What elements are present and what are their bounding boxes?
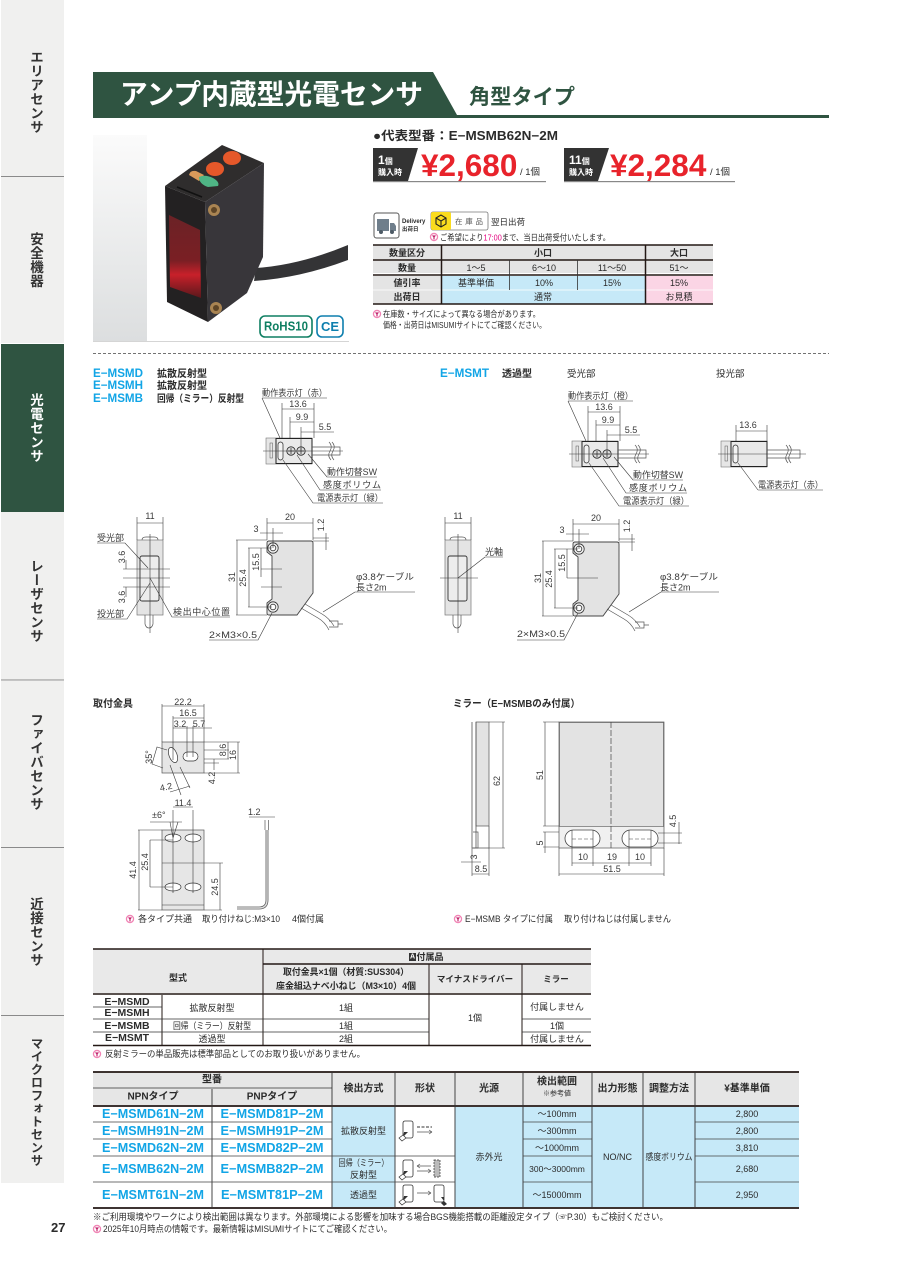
table header: 光源: [479, 1082, 499, 1094]
front view drawing: 11: [453, 511, 463, 521]
accessories table: 拡散反射型: [189, 1002, 235, 1013]
price block: [373, 128, 735, 183]
CE badge: [317, 316, 343, 337]
quantity discount table: 大口: [670, 247, 688, 258]
mirror front view: 51.5: [603, 864, 621, 874]
mirror front view: 4.5: [668, 815, 678, 827]
emitter top view: 13.6: [739, 420, 757, 430]
model numbers: E−MSMD61N−2M: [102, 1107, 204, 1121]
detection range: 300～3000mm: [529, 1164, 585, 1174]
product photo: [93, 135, 349, 342]
bracket top view: 16.5: [179, 708, 197, 718]
price tier: 11 pieces: 11個: [569, 153, 590, 167]
model numbers: E−MSMB62N−2M: [102, 1162, 204, 1176]
top view drawing: [262, 387, 383, 503]
table header: PNPタイプ: [247, 1090, 297, 1102]
table header: 調整方法: [649, 1082, 689, 1094]
prices: 2,800: [736, 1109, 758, 1119]
emitter top view: 電源表示灯（赤）: [758, 480, 823, 490]
delivery info: Delivery: [402, 219, 426, 225]
accessories table: E−MSMH: [104, 1007, 150, 1019]
prices: 2,680: [736, 1164, 758, 1174]
model and section labels: 投光部: [716, 368, 745, 380]
icon: delivery truck: [374, 213, 399, 238]
tab: fiber sensor: ファイバセンサ: [28, 713, 44, 811]
model labels: 拡散反射型: [157, 379, 207, 392]
front view drawing: 光軸: [485, 546, 503, 557]
mirror front view: 10: [578, 852, 588, 862]
detection range: ～1000mm: [535, 1143, 579, 1153]
quantity discount table: 1～5: [466, 263, 486, 273]
front view drawing: 検出中心位置: [173, 606, 230, 617]
subtitle: 角型タイプ: [469, 85, 575, 109]
price tier: 11 pieces: 購入時: [569, 167, 593, 177]
price tier: 1 piece: 購入時: [378, 167, 402, 177]
prices: [736, 1109, 758, 1200]
price tier: 11 pieces: ¥2,284: [610, 147, 707, 183]
title text: アンプ内蔵型光電センサ: [120, 79, 423, 110]
detection method: 反射型: [350, 1169, 377, 1180]
bracket note: [126, 913, 324, 924]
quantity discount table: [373, 245, 713, 304]
model labels: [93, 367, 244, 405]
side view drawing: 20: [285, 512, 295, 522]
bracket note: 取り付けねじ:M3×10: [202, 914, 280, 924]
delivery info: 出荷日: [402, 225, 419, 233]
side view drawing: 31: [227, 572, 237, 582]
side view drawing: 15.5: [251, 553, 261, 571]
accessories table: 2組: [339, 1033, 353, 1044]
accessories table: 座金組込ナベ小ねじ（M3×10）4個: [276, 980, 416, 991]
model labels: 拡散反射型: [157, 367, 207, 380]
quantity discount table: 51～: [669, 263, 689, 273]
accessories table: マイナスドライバー: [437, 974, 513, 984]
sidebar category tabs: [1, 0, 64, 1183]
front view drawing: 受光部: [97, 532, 124, 543]
accessories table: 1組: [339, 1020, 353, 1031]
model numbers: E−MSMD81P−2M: [220, 1107, 324, 1121]
tab: area sensor: [1, 0, 64, 177]
tab: laser sensor: [1, 512, 64, 680]
detection range: ～15000mm: [532, 1190, 582, 1200]
receiver top view: 9.9: [602, 415, 614, 425]
top view drawing: 5.5: [319, 422, 331, 432]
quantity discount table: 6～10: [532, 263, 556, 273]
front view drawing: 3.6: [117, 551, 127, 563]
accessories table: ミラー: [543, 974, 569, 984]
CE badge: CE: [321, 319, 339, 334]
model numbers: E−MSMH91N−2M: [102, 1124, 204, 1138]
table header: NPNタイプ: [127, 1090, 179, 1102]
price tier: 1 piece: [373, 147, 546, 183]
price tier: 11 pieces: [564, 147, 735, 183]
side view drawing: [517, 513, 719, 640]
front view drawing: [440, 511, 503, 633]
prices: 2,800: [736, 1126, 758, 1136]
bracket L side view: [237, 807, 275, 908]
detection range: ～100mm: [537, 1109, 577, 1119]
table header: ※参考値: [543, 1088, 571, 1098]
bracket top view: 35°: [144, 750, 154, 764]
bracket top view: [144, 697, 240, 795]
side view drawing: 20: [591, 513, 601, 523]
side view drawing: 15.5: [557, 554, 567, 572]
mirror front view: 10: [635, 852, 645, 862]
bracket top view: 4.2: [207, 772, 217, 784]
delivery info: 翌日出荷: [491, 217, 526, 227]
detection method: 回帰（ミラー）: [338, 1157, 388, 1168]
tab: laser sensor: レーザセンサ: [28, 559, 44, 643]
side view drawing: 長さ2m: [660, 582, 691, 592]
mirror note: 取り付けねじは付属しません: [564, 914, 671, 924]
accessories table: 1個: [468, 1012, 482, 1023]
quantity discount table: 15%: [670, 278, 688, 288]
table header: [127, 1072, 770, 1102]
accessories table: 付属品: [416, 951, 444, 962]
common specs: NO/NC: [603, 1152, 632, 1162]
side view drawing: φ3.8ケーブル: [356, 571, 414, 582]
top view drawing: 電源表示灯（緑）: [317, 492, 383, 503]
model and section labels: [440, 367, 745, 380]
bracket top view: 4.2: [159, 781, 173, 793]
model and section labels: 受光部: [567, 368, 596, 380]
mirror front view: 19: [607, 852, 617, 862]
quantity discount table: 15%: [603, 278, 621, 288]
bracket top view: 5.7: [193, 719, 205, 729]
drawing panel: mirror: [453, 697, 682, 924]
mirror side view: 62: [492, 776, 502, 786]
price tier: 1 piece: 1個: [378, 153, 393, 167]
side view drawing: 1.2: [622, 520, 632, 532]
detection method: 拡散反射型: [341, 1125, 386, 1136]
top view drawing: 感度ボリウム: [323, 479, 381, 490]
drawing panel: mounting bracket: [93, 697, 324, 924]
prices: 2,950: [736, 1190, 758, 1200]
model labels: E−MSMB: [93, 393, 143, 405]
icon: diffuse reflective: [399, 1121, 432, 1141]
quantity discount table: 数量: [398, 262, 416, 273]
bracket front view: 24.5: [210, 878, 220, 896]
price tier: 1 piece: / 1個: [520, 166, 540, 178]
side view drawing: 25.4: [544, 570, 554, 588]
delivery info: [374, 212, 610, 242]
note: same-day shipping: ご希望により17:00まで、当日出荷受付いたします。: [440, 232, 610, 242]
footnotes: 2025年10月時点の情報です。最新情報はMISUMIサイトにてご確認ください。: [103, 1223, 392, 1234]
model numbers: E−MSMT81P−2M: [221, 1188, 323, 1202]
front view drawing: 11: [145, 511, 155, 521]
side view drawing: φ3.8ケーブル: [660, 571, 718, 582]
quantity discount table: 10%: [535, 278, 553, 288]
tab: area sensor: エリアセンサ: [28, 50, 44, 134]
price tier: 11 pieces: / 1個: [710, 166, 730, 178]
icon: through beam: [399, 1185, 447, 1206]
receiver top view: 感度ボリウム: [629, 482, 687, 493]
drawing panel: through-beam type: [440, 367, 823, 640]
model numbers: E−MSMD82P−2M: [220, 1141, 324, 1155]
table header: ¥基準単価: [724, 1082, 770, 1094]
bracket note: 各タイプ共通: [138, 913, 192, 924]
accessories table: [93, 949, 591, 1046]
model and section labels: E−MSMT: [440, 368, 489, 380]
stock badge: 在 庫 品: [455, 216, 483, 226]
model numbers: E−MSMB82P−2M: [220, 1162, 324, 1176]
tab: safety devices: 安全機器: [28, 232, 44, 288]
top view drawing: 9.9: [296, 412, 308, 422]
quantity discount table: 通常: [534, 291, 552, 302]
receiver top view: 5.5: [625, 425, 637, 435]
side view drawing: 2×M3×0.5: [517, 629, 565, 639]
drawing panel: diffuse and retro reflective types: [93, 367, 415, 640]
bracket top view: 16: [228, 750, 238, 760]
mirror side view: [461, 722, 505, 876]
side view drawing: 1.2: [316, 519, 326, 531]
mirror side view: 3: [469, 854, 479, 860]
tab: safety devices: [1, 177, 64, 343]
emitter top view: [718, 420, 823, 490]
front view drawing: [97, 511, 230, 633]
bracket L side view: 1.2: [248, 807, 261, 817]
stock note: [373, 309, 546, 330]
tab: micro photo sensor: [1, 1016, 64, 1183]
tab: photoelectric sensor active: 光電センサ: [28, 392, 44, 463]
accessories table: 付属しません: [530, 1034, 584, 1044]
quantity discount table: 小口: [534, 247, 552, 258]
receiver top view: 電源表示灯（緑）: [623, 495, 689, 506]
prices: 3,810: [736, 1143, 758, 1153]
model numbers: E−MSMT61N−2M: [102, 1188, 204, 1202]
heading: 取付金具: [93, 697, 133, 710]
quantity discount table: 数量区分: [389, 247, 425, 258]
model labels: E−MSMH: [93, 380, 143, 392]
table header: 検出方式: [344, 1082, 384, 1094]
common specs: 感度ボリウム: [646, 1151, 692, 1162]
quantity discount table: 基準単価: [458, 277, 494, 288]
side view drawing: [209, 512, 415, 640]
bracket front view: ±6°: [152, 810, 166, 820]
detection method: [338, 1125, 388, 1200]
icon: retro reflective: [399, 1160, 440, 1180]
footnotes: ※ご利用環境やワークにより検出範囲は異なります。外部環境による影響を加味する場合BGS機能搭載の距離設定タイプ（☞P.30）もご検討ください。: [93, 1211, 668, 1222]
tab: photoelectric sensor active: [1, 344, 64, 512]
side view drawing: 2×M3×0.5: [209, 630, 257, 640]
table header: 検出範囲: [537, 1074, 577, 1088]
price tier: 1 piece: ¥2,680: [421, 147, 517, 183]
common specs: 赤外光: [475, 1151, 503, 1162]
bracket front view: 11.4: [175, 798, 191, 808]
quantity discount table: お見積: [665, 291, 693, 302]
representative model: ●代表型番：E−MSMB62N−2M: [373, 128, 558, 143]
table header: 出力形態: [598, 1082, 638, 1094]
stock note: 価格・出荷日はMISUMIサイトにてご確認ください。: [383, 320, 546, 330]
side view drawing: 長さ2m: [356, 582, 387, 592]
detection range: ～300mm: [537, 1126, 577, 1136]
quantity discount table: 出荷日: [393, 291, 421, 302]
side view drawing: 25.4: [238, 569, 248, 587]
tab: proximity sensor: 近接センサ: [28, 896, 44, 967]
front view drawing: 3.6: [117, 591, 127, 603]
quantity discount table: 11～50: [598, 263, 626, 273]
page number: 27: [51, 1220, 65, 1235]
accessories table: 型式: [169, 972, 187, 983]
receiver top view: [568, 390, 689, 506]
model numbers: E−MSMD62N−2M: [102, 1141, 204, 1155]
table header: 形状: [415, 1082, 435, 1094]
bracket top view: 8.6: [218, 744, 228, 756]
model and section labels: 透過型: [502, 367, 532, 380]
bracket top view: 22.2: [174, 697, 192, 707]
receiver top view: 動作表示灯（橙）: [568, 390, 633, 401]
mirror front view: [535, 722, 682, 876]
accessories table: 取付金具×1個（材質:SUS304）: [283, 966, 409, 977]
side view drawing: 3: [253, 524, 259, 534]
bracket top view: 3.2: [174, 719, 186, 729]
model labels: 回帰（ミラー）反射型: [157, 392, 244, 405]
mirror note: E−MSMB タイプに付属: [465, 914, 553, 924]
mirror side view: 8.5: [475, 864, 487, 874]
tab: fiber sensor: [1, 681, 64, 848]
accessories table: A: [410, 954, 415, 960]
specification and price table: [93, 1072, 799, 1208]
top view drawing: 13.6: [289, 399, 307, 409]
detection method: 透過型: [350, 1190, 377, 1200]
model numbers: E−MSMH91P−2M: [220, 1124, 324, 1138]
bracket front view: 41.4: [128, 861, 138, 879]
top view drawing: 動作切替SW: [327, 466, 377, 477]
front view drawing: 投光部: [97, 608, 124, 619]
accessories table: E−MSMB: [104, 1020, 150, 1032]
bracket front view: [128, 798, 223, 910]
mirror front view: 51: [535, 770, 545, 780]
top view drawing: 動作表示灯（赤）: [262, 387, 327, 398]
tab: micro photo sensor: マイクロフォトセンサ: [28, 1037, 43, 1167]
mirror note: [454, 914, 671, 924]
stock note: 在庫数・サイズによって異なる場合があります。: [383, 309, 540, 319]
accessories table: 付属しません: [530, 1002, 584, 1012]
accessories table: 透過型: [198, 1034, 226, 1044]
footnotes: [93, 1211, 668, 1234]
RoHS badge: [260, 316, 312, 337]
accessories table: E−MSMD: [104, 996, 150, 1008]
receiver top view: 13.6: [595, 402, 613, 412]
bracket note: 4個付属: [292, 913, 324, 924]
stock badge: [431, 212, 488, 230]
table header: 型番: [202, 1072, 222, 1086]
common specs: [475, 1151, 692, 1162]
accessories table: E−MSMT: [105, 1032, 150, 1044]
receiver top view: 動作切替SW: [633, 469, 683, 480]
title banner: [93, 72, 829, 118]
accessories table: 1組: [339, 1002, 353, 1013]
accessories table: 回帰（ミラー）反射型: [173, 1020, 251, 1031]
quantity discount table: 値引率: [393, 277, 421, 288]
side view drawing: 31: [533, 573, 543, 583]
detection range: [529, 1109, 585, 1200]
heading: ミラー（E−MSMBのみ付属）: [453, 697, 580, 710]
mirror front view: 5: [535, 840, 545, 846]
accessories note: 反射ミラーの単品販売は標準部品としてのお取り扱いがありません。: [105, 1048, 365, 1059]
RoHS badge: RoHS10: [264, 320, 308, 334]
model numbers: [102, 1107, 324, 1202]
bracket front view: 25.4: [140, 853, 150, 871]
tab: proximity sensor: [1, 848, 64, 1016]
model labels: E−MSMD: [93, 368, 143, 380]
accessories table: 1個: [550, 1020, 564, 1031]
side view drawing: 3: [559, 525, 565, 535]
